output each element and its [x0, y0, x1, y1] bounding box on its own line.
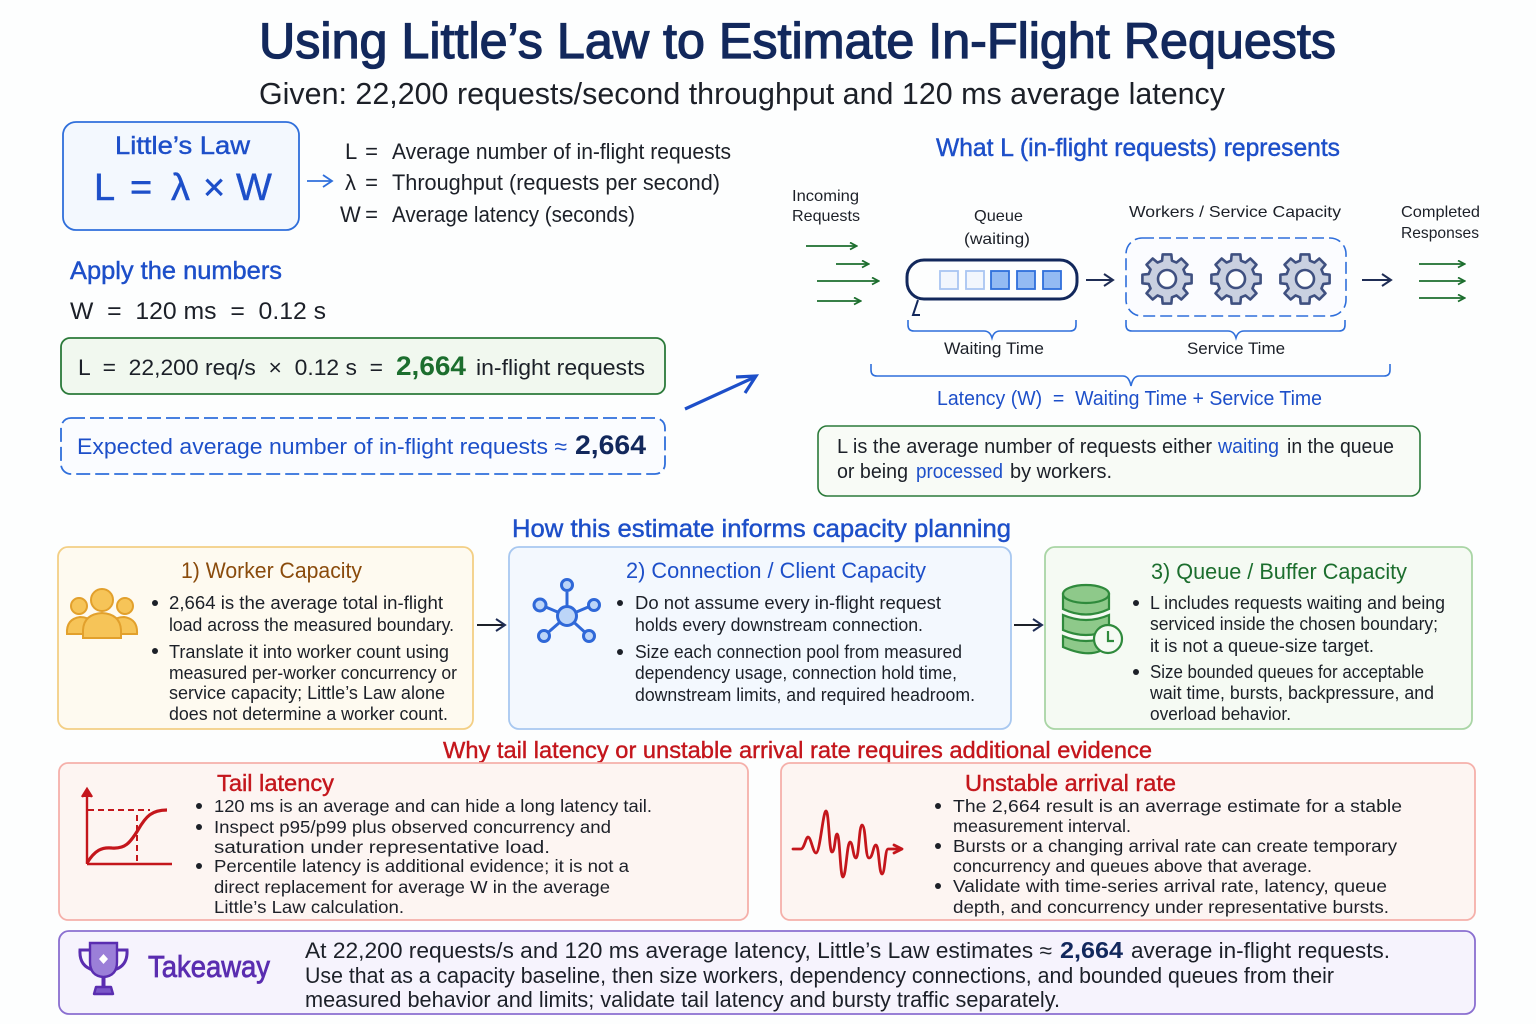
latency conversion: W = 120 ms = 0.12 s: [70, 298, 326, 325]
bullets: worker capacity: 2,664 is the average total in-flight: [169, 593, 443, 613]
definitions of L, lambda, W: [340, 139, 731, 227]
title: Using Little’s Law to Estimate In-Flight Requests: [259, 13, 1336, 69]
bullets: worker capacity: Translate it into worker count using: [169, 642, 449, 662]
bullets: worker capacity: measured per-worker concurrency or: [169, 663, 457, 683]
bullets: queue capacity: wait time, bursts, backpressure, and: [1149, 683, 1434, 703]
bracket: latency total: Latency (W) = Waiting Time + Service Time: [937, 388, 1322, 410]
bullets: queue capacity: L includes requests waiting and being: [1150, 593, 1445, 613]
bullets: connection capacity: Size each connection pool from measured: [635, 642, 962, 662]
arrows: outgoing: [1419, 264, 1464, 298]
bracket: waiting time: [908, 320, 1076, 358]
panel: Little's Law formula: Little’s Law: [115, 132, 251, 160]
icon: network: [534, 580, 600, 642]
bullets: unstable arrival rate: measurement interval.: [953, 816, 1131, 836]
bullets: worker capacity: [152, 593, 457, 724]
label: workers: Workers / Service Capacity: [1129, 204, 1341, 221]
heading: capacity planning: How this estimate informs capacity planning: [512, 515, 1011, 543]
icon: database with clock: [1063, 585, 1122, 653]
bullets: tail latency: 120 ms is an average and can hide a long latency tail.: [214, 796, 652, 816]
definitions of L, lambda, W: Throughput (requests per second): [392, 170, 720, 195]
bullets: tail latency: saturation under representative load.: [214, 837, 550, 857]
icon: people: [67, 589, 137, 638]
panel: connection capacity: [509, 547, 1011, 729]
callout: meaning of L: or being: [837, 461, 908, 483]
panel: worker capacity: [58, 547, 473, 729]
heading: additional evidence: Why tail latency or unstable arrival rate requires additional evidence: [443, 737, 1152, 763]
icon: latency chart: [82, 789, 172, 864]
callout: meaning of L: in the queue: [1287, 436, 1394, 458]
bullets: queue capacity: Size bounded queues for acceptable: [1150, 662, 1424, 682]
definitions of L, lambda, W: Average number of in-flight requests: [392, 139, 731, 164]
subtitle: Given: 22,200 requests/second throughput and 120 ms average latency: [259, 76, 1225, 111]
panel: expected result: Expected average number of in-flight requests ≈: [77, 434, 567, 459]
label: completed responses: Responses: [1401, 225, 1479, 242]
bullets: connection capacity: Do not assume every in-flight request: [635, 593, 941, 613]
heading: tail latency: Tail latency: [217, 770, 335, 796]
arrow: connection to queue: [1014, 624, 1042, 626]
icon: spiky signal: [793, 811, 902, 877]
workers group: [1126, 238, 1346, 316]
queue: [907, 260, 1077, 315]
icon: trophy: [80, 943, 127, 994]
diagram: request flow: [792, 188, 1480, 410]
heading: apply the numbers: Apply the numbers: [70, 257, 282, 285]
bullets: tail latency: Little’s Law calculation.: [214, 897, 404, 917]
bullets: worker capacity: does not determine a worker count.: [169, 704, 448, 724]
bullets: queue capacity: overload behavior.: [1150, 704, 1291, 724]
arrow: queue to workers: [1086, 279, 1113, 281]
bullets: tail latency: Inspect p95/p99 plus observed concurrency and: [214, 817, 611, 837]
bracket: service time: Service Time: [1187, 339, 1285, 358]
definitions of L, lambda, W: λ =: [345, 170, 378, 195]
heading: connection capacity: 2) Connection / Client Capacity: [626, 558, 926, 583]
label: queue: Queue: [974, 208, 1023, 225]
panel: takeaway: [59, 931, 1475, 1014]
bullets: worker capacity: service capacity; Little’s Law alone: [169, 683, 445, 703]
definitions of L, lambda, W: W =: [340, 202, 378, 227]
definitions of L, lambda, W: Average latency (seconds): [392, 202, 635, 227]
heading: worker capacity: 1) Worker Capacity: [181, 558, 362, 583]
panel: Little's Law formula: λ: [171, 167, 190, 209]
bullets: tail latency: Percentile latency is additional evidence; it is not a: [214, 856, 629, 876]
bracket: waiting time: Waiting Time: [944, 339, 1044, 358]
heading: queue capacity: 3) Queue / Buffer Capacity: [1151, 559, 1407, 584]
heading: takeaway: Takeaway: [148, 949, 270, 984]
panel: tail latency: [59, 763, 748, 920]
bullets: queue capacity: it is not a queue-size target.: [1150, 636, 1374, 656]
panel: Little's Law formula: ×: [203, 167, 225, 209]
takeaway text: At 22,200 requests/s and 120 ms average latency, Little’s Law estimates ≈: [305, 938, 1052, 963]
heading: unstable arrival rate: Unstable arrival rate: [965, 770, 1176, 796]
label: incoming requests: Incoming: [792, 188, 859, 205]
label: incoming requests: [792, 188, 860, 225]
panel: expected result: [61, 418, 665, 474]
panel: calculation: [61, 338, 665, 394]
takeaway text: average in-flight requests.: [1131, 938, 1390, 963]
bullets: unstable arrival rate: Validate with time-series arrival rate, latency, queue: [953, 876, 1387, 896]
bullets: worker capacity: load across the measured boundary.: [169, 615, 454, 635]
callout: meaning of L: by workers.: [1010, 461, 1112, 483]
bullets: unstable arrival rate: Bursts or a changing arrival rate can create temporary: [953, 836, 1397, 856]
label: completed responses: Completed: [1401, 204, 1480, 221]
definitions of L, lambda, W: L =: [345, 139, 378, 164]
takeaway text: measured behavior and limits; validate tail latency and bursty traffic separately.: [305, 987, 1060, 1012]
bracket: service time: [1126, 320, 1345, 358]
bullets: connection capacity: downstream limits, and required headroom.: [635, 685, 975, 705]
arrow: formula to definitions: [307, 180, 332, 182]
takeaway text: Use that as a capacity baseline, then size workers, dependency connections, and bounded queues from their: [305, 963, 1334, 988]
label: queue: [964, 208, 1030, 248]
arrow: worker to connection: [477, 624, 505, 626]
callout: meaning of L: [818, 426, 1420, 496]
callout: meaning of L: processed: [916, 461, 1003, 483]
arrow: result to diagram: [685, 376, 756, 409]
bullets: unstable arrival rate: The 2,664 result is an averrage estimate for a stable: [953, 796, 1402, 816]
heading: what L represents: What L (in-flight requests) represents: [936, 134, 1340, 162]
callout: meaning of L: L is the average number of requests either: [837, 436, 1212, 458]
label: completed responses: [1401, 204, 1480, 242]
bullets: tail latency: direct replacement for average W in the average: [214, 877, 610, 897]
bullets: unstable arrival rate: depth, and concurrency under representative bursts.: [953, 897, 1389, 917]
panel: expected result: 2,664: [575, 430, 646, 460]
panel: Little's Law formula: =: [130, 167, 152, 209]
arrow: workers to responses: [1362, 279, 1391, 281]
bullets: unstable arrival rate: [935, 796, 1402, 917]
label: queue: (waiting): [964, 231, 1030, 248]
panel: unstable arrival rate: [781, 763, 1475, 920]
callout: meaning of L: waiting: [1217, 436, 1279, 458]
bullets: queue capacity: [1133, 593, 1445, 724]
panel: calculation: in-flight requests: [476, 355, 645, 380]
panel: Little's Law formula: L: [94, 167, 115, 209]
panel: calculation: 2,664: [396, 351, 466, 381]
takeaway text: 2,664: [1060, 937, 1123, 963]
label: incoming requests: Requests: [792, 208, 860, 225]
bullets: connection capacity: dependency usage, connection hold time,: [635, 663, 957, 683]
bullets: queue capacity: serviced inside the chosen boundary;: [1150, 614, 1438, 634]
bullets: connection capacity: [617, 593, 975, 705]
arrows: incoming: [806, 246, 878, 301]
panel: Little's Law formula: [63, 122, 299, 230]
panel: queue capacity: [1045, 547, 1472, 729]
bracket: latency total: [871, 364, 1390, 410]
bullets: unstable arrival rate: concurrency and queues above that average.: [953, 856, 1312, 876]
panel: calculation: L = 22,200 req/s × 0.12 s =: [78, 355, 383, 380]
bullets: connection capacity: holds every downstream connection.: [635, 615, 923, 635]
takeaway text: [305, 937, 1390, 1012]
panel: Little's Law formula: W: [236, 167, 272, 209]
bullets: tail latency: [196, 796, 652, 917]
